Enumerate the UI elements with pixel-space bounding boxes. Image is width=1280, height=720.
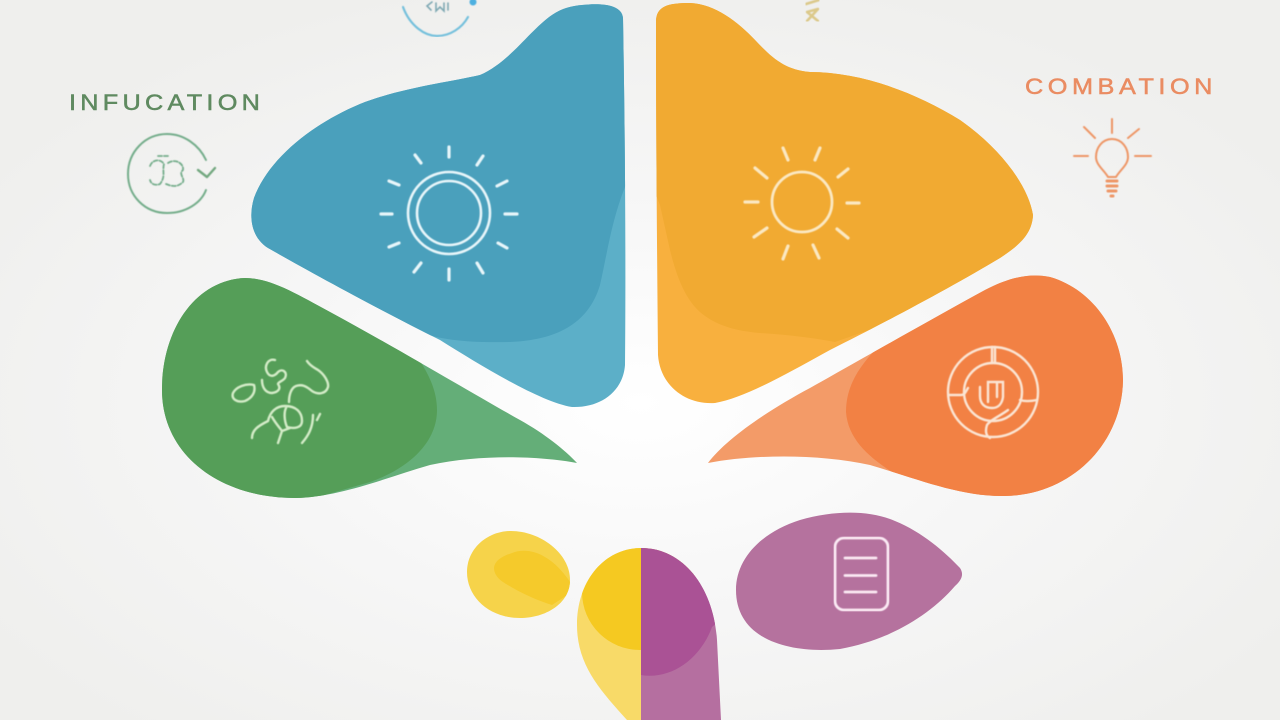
- cropped label: top squiggle: [806, 0, 819, 21]
- panel: yellow blob: [467, 531, 575, 618]
- icon: sun: [745, 148, 859, 259]
- icon: squiggles: [233, 360, 328, 443]
- icon: green circular arrow: [128, 134, 215, 213]
- label: infucation: INFUCATION: [69, 91, 260, 116]
- icon: blue circular badge: [403, 0, 476, 36]
- icon: segmented ring: [948, 347, 1038, 438]
- label: combation: COMBATION: [1025, 75, 1212, 100]
- panel: coral petal: [708, 265, 1130, 505]
- panel: green petal: [162, 278, 577, 498]
- panel: split teardrop: [577, 548, 721, 720]
- icon: double ring sun: [381, 147, 517, 280]
- icon: light bulb: [1074, 119, 1151, 196]
- panel: orange petal: [650, 0, 1040, 403]
- icon: document: [835, 538, 888, 610]
- panel: purple leaf: [736, 513, 962, 650]
- panel: blue petal: [240, 0, 630, 407]
